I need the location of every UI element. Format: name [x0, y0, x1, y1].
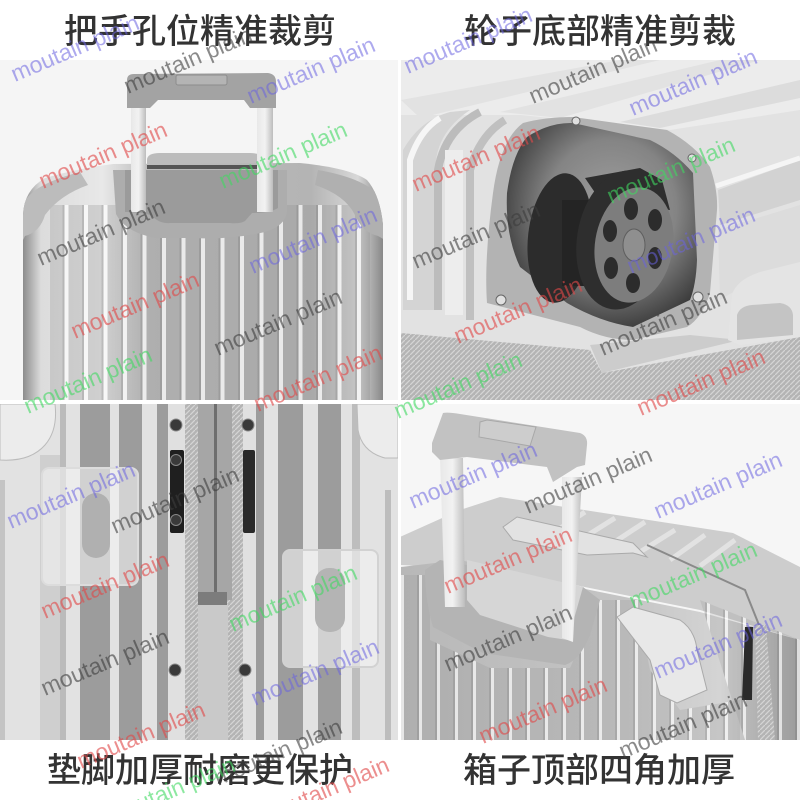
wheel well plate — [486, 117, 717, 340]
wheel face — [594, 187, 672, 303]
watermarks: moutain plain — [210, 713, 346, 791]
watermarks: moutain plain — [440, 599, 576, 677]
side ribs near the corner — [700, 600, 800, 740]
handle grip — [127, 73, 276, 108]
grip button — [479, 420, 536, 446]
watermarks: moutain plain — [400, 1, 536, 79]
hub — [623, 229, 645, 261]
watermarks: moutain plain — [20, 341, 156, 419]
case front — [401, 560, 800, 740]
watermarks: moutain plain — [250, 339, 386, 417]
wheel well interior — [507, 123, 697, 327]
plate screws — [496, 117, 703, 305]
case top ribs — [550, 512, 735, 566]
watermarks: moutain plain — [408, 119, 544, 197]
watermarks: moutain plain — [225, 559, 361, 637]
case top ribs — [401, 60, 800, 130]
zipper teeth — [214, 404, 217, 596]
case top — [400, 497, 800, 640]
suitcase body — [23, 160, 385, 400]
dark corner brackets — [170, 450, 255, 533]
watermarks: moutain plain — [247, 633, 383, 711]
panel: top corner reinforcement — [400, 404, 800, 740]
carry handle — [503, 517, 647, 557]
handle grip — [432, 413, 587, 482]
gray rib bands — [0, 404, 391, 740]
wheel holes — [603, 198, 662, 293]
recess top line — [147, 165, 263, 169]
corner silver gradient — [590, 335, 740, 373]
zipper band — [185, 404, 243, 740]
zipper edge — [401, 333, 800, 400]
watermarks: moutain plain — [625, 43, 761, 121]
wheel axle — [578, 280, 584, 286]
watermarks: moutain plain — [210, 283, 346, 361]
handle recess rim — [425, 560, 600, 665]
case side ribs — [403, 110, 505, 320]
watermarks: moutain plain — [520, 441, 656, 519]
watermarks: moutain plain — [390, 346, 526, 424]
carry handle behind the pull bar — [147, 153, 257, 164]
watermarks: moutain plain — [440, 521, 576, 599]
watermarks: moutain plain — [650, 446, 786, 524]
watermarks: moutain plain — [475, 671, 611, 749]
handle tubes — [131, 106, 273, 212]
panel: handle hole cutout — [0, 60, 398, 400]
grip button — [176, 75, 227, 85]
watermarks: moutain plain — [7, 9, 143, 87]
clear pad right — [283, 550, 378, 667]
watermarks: moutain plain — [215, 116, 351, 194]
watermarks: moutain plain — [450, 271, 586, 349]
watermarks: moutain plain — [37, 546, 173, 624]
watermarks: moutain plain — [405, 436, 541, 514]
watermarks: moutain plain — [525, 31, 661, 109]
panel: protective foot pads — [0, 404, 398, 740]
watermarks: moutain plain — [35, 116, 171, 194]
handle recess rim — [113, 170, 287, 238]
recess pad — [467, 560, 583, 640]
watermarks: moutain plain — [595, 283, 731, 361]
wheel fork — [585, 168, 670, 210]
watermarks: moutain plain — [73, 696, 209, 774]
title: bottom left: 垫脚加厚耐磨更保护 — [47, 752, 353, 790]
wheel — [528, 168, 672, 310]
zipper lines — [647, 545, 770, 740]
panel: wheel bottom cutout — [401, 60, 800, 400]
watermarks: moutain plain — [245, 201, 381, 279]
zipper pull — [198, 592, 227, 605]
case front ribs — [401, 575, 740, 740]
central bar — [168, 404, 256, 740]
watermarks: moutain plain — [625, 536, 761, 614]
recess pad — [125, 170, 278, 223]
zipper lower channel — [198, 604, 228, 740]
corner guard — [617, 607, 707, 703]
zipper dark section — [742, 627, 753, 700]
watermarks: moutain plain — [408, 196, 544, 274]
zipper band — [755, 625, 775, 740]
top left corner guard — [0, 404, 56, 460]
corner latch frame — [728, 339, 740, 342]
right corner guard — [315, 170, 385, 240]
watermarks: moutain plain — [243, 31, 379, 109]
title: bottom right: 箱子顶部四角加厚 — [463, 752, 735, 790]
title: top right: 轮子底部精准剪裁 — [464, 13, 736, 51]
watermarks: moutain plain — [623, 201, 759, 279]
watermarks: moutain plain — [615, 686, 751, 764]
top right corner guard — [357, 404, 398, 458]
watermarks: moutain plain — [107, 461, 243, 539]
watermarks: moutain plain — [650, 606, 786, 684]
latch knob — [737, 303, 793, 340]
title: top left: 把手孔位精准裁剪 — [64, 13, 336, 51]
watermarks: moutain plain — [603, 131, 739, 209]
watermarks: moutain plain — [67, 266, 203, 344]
watermarks: moutain plain — [633, 343, 769, 421]
left corner guard — [23, 172, 88, 240]
zipper tape — [198, 404, 232, 600]
watermarks: moutain plain — [3, 456, 139, 534]
clear pad left — [42, 468, 138, 585]
rivets — [169, 419, 254, 676]
handle tubes — [440, 458, 582, 642]
front tread — [576, 170, 638, 310]
watermarks: moutain plain — [120, 21, 256, 99]
watermarks: moutain plain — [37, 623, 173, 701]
back wheel — [528, 173, 589, 303]
right side ribs — [716, 156, 800, 225]
watermarks: moutain plain — [33, 193, 169, 271]
